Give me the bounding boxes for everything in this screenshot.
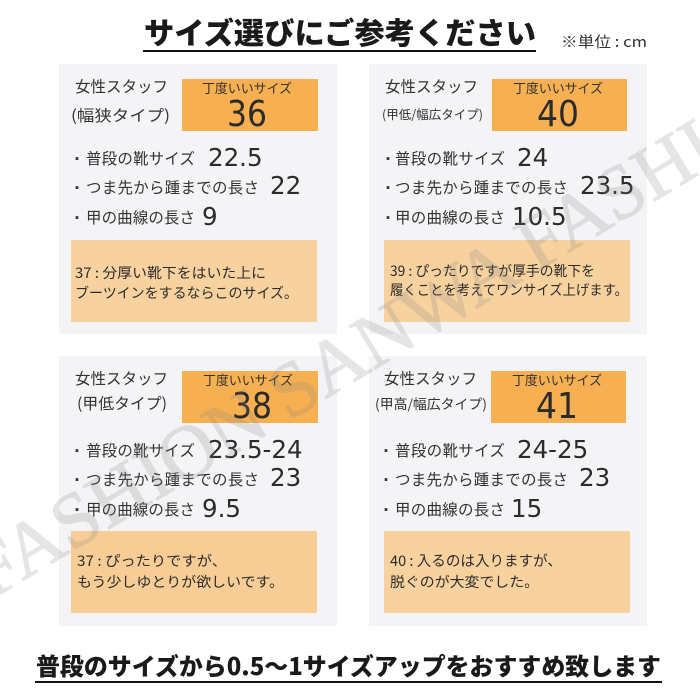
measurement rows: 22.5 bbox=[208, 143, 263, 172]
recommended size box: 36 bbox=[227, 94, 267, 135]
measurement rows: 甲の曲線の長さ bbox=[86, 206, 195, 228]
foot type: (幅狭タイプ) bbox=[71, 104, 170, 126]
note: 37 : ぴったりですが、 bbox=[77, 551, 227, 571]
measurement rows bbox=[385, 143, 635, 231]
title: サイズ選びにご参考ください bbox=[144, 9, 536, 53]
panel: size 40 bbox=[369, 64, 647, 334]
measurement rows: · bbox=[74, 471, 80, 489]
measurement rows: 24-25 bbox=[517, 435, 588, 464]
measurement rows: 普段の靴サイズ bbox=[395, 439, 505, 461]
measurement rows: 甲の曲線の長さ bbox=[86, 498, 195, 520]
measurement rows: · bbox=[385, 150, 391, 168]
foot type: (甲低タイプ) bbox=[77, 392, 167, 414]
measurement rows bbox=[74, 143, 301, 231]
note: 39 : ぴったりですが厚手の靴下を bbox=[390, 261, 595, 281]
measurement rows: 23.5 bbox=[580, 171, 635, 200]
measurement rows: つま先から踵までの長さ bbox=[86, 176, 259, 198]
measurement rows: · bbox=[74, 150, 80, 168]
recommended size box bbox=[492, 78, 627, 135]
staff label: 女性スタッフ bbox=[75, 367, 168, 389]
measurement rows: · bbox=[385, 209, 391, 227]
note bbox=[71, 531, 317, 613]
measurement rows: · bbox=[383, 442, 389, 460]
note bbox=[384, 240, 630, 322]
recommended size box: 丁度いいサイズ bbox=[513, 78, 603, 97]
recommended size box: 38 bbox=[232, 386, 272, 427]
recommended size box bbox=[182, 78, 318, 135]
note: もう少しゆとりが欲しいです。 bbox=[77, 572, 284, 592]
measurement rows: · bbox=[74, 209, 80, 227]
panel: size 38 bbox=[59, 356, 337, 626]
recommended size box: 丁度いいサイズ bbox=[512, 370, 602, 389]
recommended size box: 丁度いいサイズ bbox=[202, 78, 292, 97]
recommended size box bbox=[182, 370, 318, 427]
measurement rows: つま先から踵までの長さ bbox=[395, 176, 568, 198]
measurement rows: 普段の靴サイズ bbox=[395, 147, 505, 169]
note: ブーツインをするならこのサイズ。 bbox=[75, 283, 298, 303]
recommended size box bbox=[491, 370, 626, 427]
measurement rows: 23 bbox=[270, 463, 301, 492]
unit note: ※単位 : cm bbox=[561, 31, 647, 52]
measurement rows: 23 bbox=[579, 463, 610, 492]
staff label: 女性スタッフ bbox=[75, 75, 168, 97]
measurement rows: つま先から踵までの長さ bbox=[395, 468, 568, 490]
note bbox=[384, 531, 630, 613]
measurement rows: 22 bbox=[270, 171, 301, 200]
measurement rows: 普段の靴サイズ bbox=[86, 147, 195, 169]
recommended size box: 丁度いいサイズ bbox=[203, 370, 293, 389]
measurement rows: 9 bbox=[202, 202, 218, 231]
staff label: 女性スタッフ bbox=[384, 367, 477, 389]
closing recommendation: 普段のサイズから0.5～1サイズアップをおすすめ致します bbox=[36, 647, 661, 682]
note: 脱ぐのが大変でした。 bbox=[390, 572, 539, 592]
measurement rows: · bbox=[74, 501, 80, 519]
panel: size 36 bbox=[59, 64, 337, 334]
measurement rows: · bbox=[383, 501, 389, 519]
note: 37 : 分厚い靴下をはいた上に bbox=[75, 263, 266, 283]
measurement rows: 9.5 bbox=[202, 494, 241, 523]
foot type: (甲高/幅広タイプ) bbox=[375, 393, 487, 413]
note: 40 : 入るのは入りますが、 bbox=[390, 550, 562, 571]
measurement rows bbox=[74, 435, 303, 523]
staff label: 女性スタッフ bbox=[385, 75, 478, 97]
measurement rows: · bbox=[383, 471, 389, 489]
measurement rows: · bbox=[74, 442, 80, 460]
measurement rows bbox=[383, 435, 610, 523]
note: 履くことを考えてワンサイズ上げます。 bbox=[390, 280, 628, 300]
measurement rows: 甲の曲線の長さ bbox=[395, 498, 505, 520]
measurement rows: 24 bbox=[517, 143, 548, 172]
measurement rows: 10.5 bbox=[512, 202, 567, 231]
panel: size 41 bbox=[369, 356, 647, 626]
measurement rows: 15 bbox=[511, 494, 542, 523]
measurement rows: 普段の靴サイズ bbox=[86, 439, 195, 461]
foot type: (甲低/幅広タイプ) bbox=[382, 104, 483, 123]
measurement rows: 23.5-24 bbox=[208, 435, 303, 464]
measurement rows: つま先から踵までの長さ bbox=[86, 468, 259, 490]
note bbox=[71, 240, 317, 322]
measurement rows: 甲の曲線の長さ bbox=[395, 206, 505, 228]
measurement rows: · bbox=[385, 179, 391, 197]
recommended size box: 40 bbox=[537, 94, 579, 135]
measurement rows: · bbox=[74, 179, 80, 197]
recommended size box: 41 bbox=[536, 386, 578, 427]
